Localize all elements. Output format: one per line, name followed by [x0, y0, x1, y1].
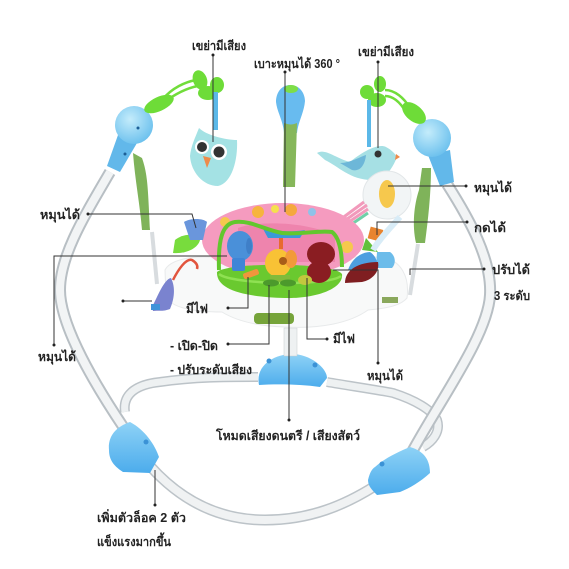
base ring front	[150, 466, 375, 520]
label: volume: - ปรับระดับเสียง	[170, 363, 252, 377]
label: rotates left lower: หมุนได้	[38, 349, 76, 365]
left frame tube	[60, 172, 124, 428]
owl toy	[190, 92, 237, 186]
label: rotates bottom: หมุนได้	[367, 368, 403, 384]
centre elastic strap	[283, 123, 297, 187]
right elastic strap	[410, 168, 431, 295]
label: seat rotates 360: เบาะหมุนได้ 360 °	[254, 56, 340, 72]
clear spinner ball	[363, 171, 411, 219]
label: sound modes: โหมดเสียงดนตรี / เสียงสัตว์	[215, 428, 360, 443]
label: stronger: แข็งแรงมากขึ้น	[97, 532, 171, 549]
right tiger toy	[362, 227, 383, 252]
pink seat	[202, 203, 364, 277]
label: press: กดได้	[474, 220, 506, 235]
base ring back	[125, 377, 438, 447]
label: added locks: เพิ่มตัวล็อค 2 ตัว	[97, 509, 186, 525]
bird toy	[317, 100, 400, 180]
right foot	[368, 447, 430, 495]
left hanger head	[107, 106, 153, 172]
jungle sticker	[254, 313, 294, 324]
label: shake sound left: เขย่ามีเสียง	[192, 39, 246, 53]
label: rotates left upper: หมุนได้	[40, 207, 80, 223]
panel light	[298, 275, 312, 285]
label: shake sound right: เขย่ามีเสียง	[358, 45, 414, 59]
left green toy	[173, 219, 207, 253]
left foot	[109, 422, 159, 473]
tray logo	[382, 297, 398, 303]
right green arch toy bar	[360, 76, 430, 128]
white tray	[165, 257, 408, 327]
label: rotates right: หมุนได้	[474, 180, 512, 196]
left elastic strap	[133, 153, 157, 284]
centre hanging bulb	[276, 85, 305, 133]
panel orange button	[242, 268, 260, 280]
label: three levels: 3 ระดับ	[494, 289, 530, 303]
left green arch toy bar	[142, 68, 224, 117]
panel switch left	[263, 280, 279, 286]
label: has light left: มีไฟ	[186, 301, 208, 316]
label: has light right: มีไฟ	[333, 331, 355, 346]
centre post	[284, 328, 297, 356]
elephant toy	[227, 231, 253, 271]
panel switch right	[280, 280, 296, 286]
yellow chick toy	[265, 238, 297, 282]
right hanger head	[413, 119, 454, 186]
purple lizard teether	[151, 260, 197, 311]
leader lines	[52, 54, 486, 506]
blue rainbow dome toy	[345, 217, 400, 283]
rainbow	[337, 202, 368, 228]
green panel	[217, 265, 342, 298]
centre foot	[258, 354, 327, 387]
green arch over panel	[219, 222, 342, 270]
red squirrel toy	[307, 242, 335, 283]
label: on off: - เปิด-ปิด	[170, 339, 218, 353]
label: adjustable: ปรับได้	[492, 262, 530, 277]
right frame tube	[412, 184, 490, 452]
